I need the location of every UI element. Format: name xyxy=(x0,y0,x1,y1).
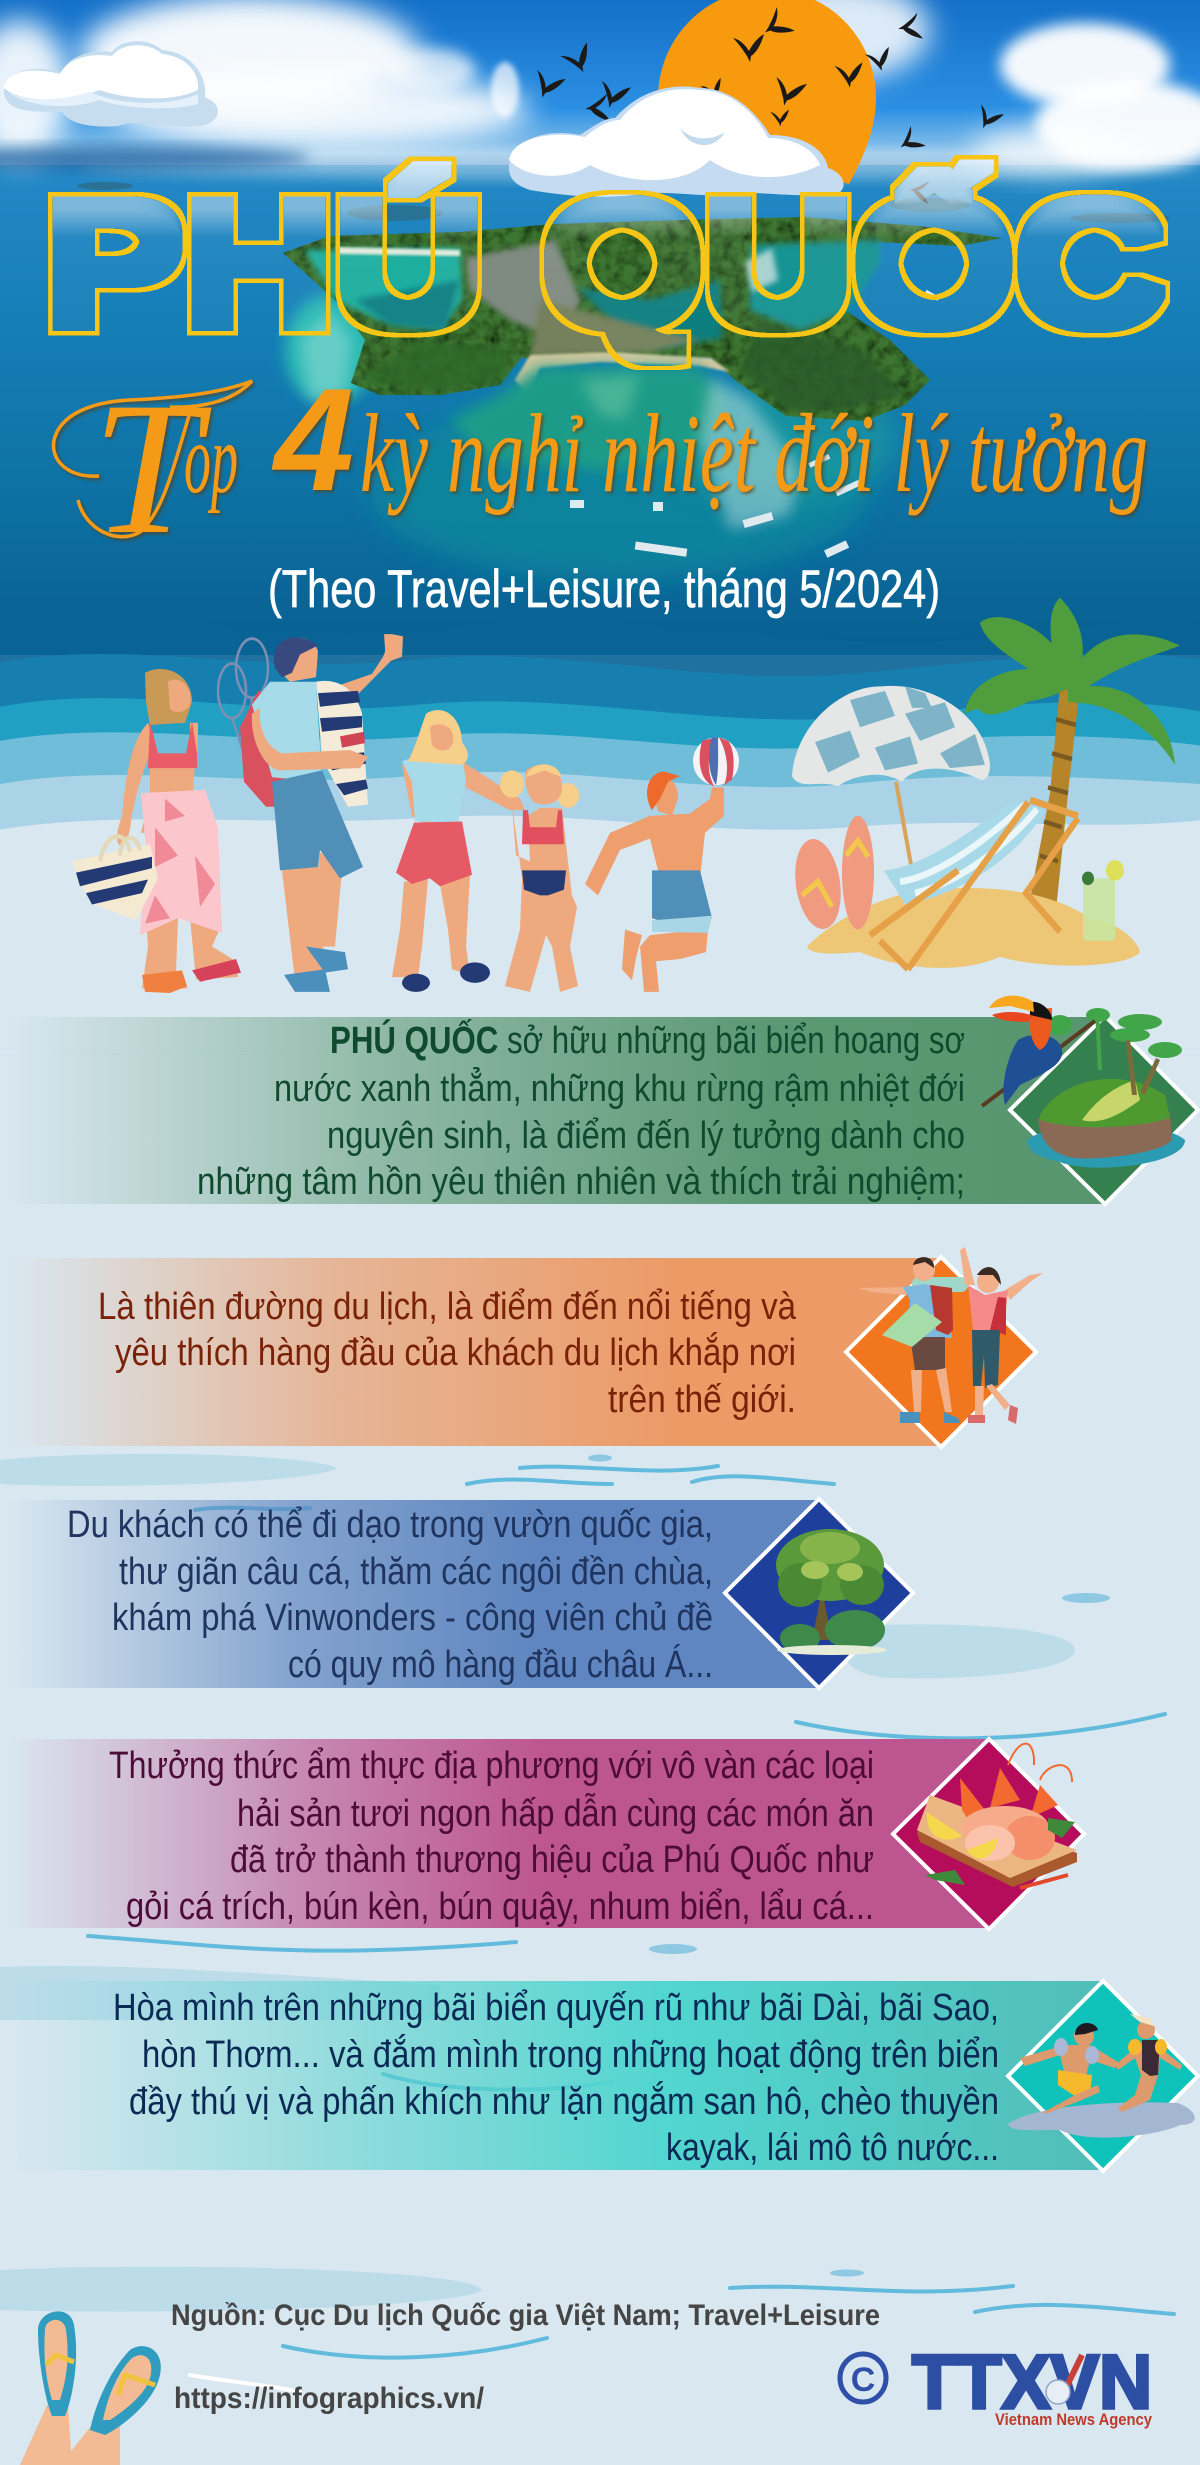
subtitle: Top 4: 4 xyxy=(271,358,354,521)
diamond with island and toucan xyxy=(982,996,1198,1204)
bays xyxy=(305,248,462,330)
body text: kayak, lái mô tô nước... xyxy=(666,2127,999,2169)
body text: nguyên sinh, là điểm đến lý tưởng dành cho xyxy=(327,1115,965,1157)
diamond with seafood board xyxy=(893,1739,1084,1929)
diamond with two travellers xyxy=(846,1247,1043,1447)
body text: trên thế giới. xyxy=(608,1379,796,1421)
body text: yêu thích hàng đầu của khách du lịch khắp nơi xyxy=(115,1331,796,1374)
icon: feet in flip-flops xyxy=(20,2311,161,2465)
body text xyxy=(197,1017,965,1203)
source text: Nguồn: Cục Du lịch Quốc gia Việt Nam; Travel+Leisure xyxy=(171,2299,880,2332)
subtitle: Top 4: T xyxy=(92,364,212,574)
far islands xyxy=(77,182,1170,223)
body text: hải sản tươi ngon hấp dẫn cùng các món ăn xyxy=(237,1792,874,1835)
subtitle: Top 4 xyxy=(53,358,1148,574)
body text: PHÚ QUỐC sở hữu những bãi biển hoang sơ xyxy=(330,1017,965,1062)
flock of birds xyxy=(528,5,1004,204)
logo: TTXVN: TTXVN xyxy=(912,2340,1152,2425)
illustrated cloud: small left xyxy=(4,41,218,127)
body text: khám phá Vinwonders - công viên chủ đề xyxy=(112,1597,713,1639)
body text xyxy=(113,1987,999,2169)
panel: thiên đường du lịch xyxy=(10,1247,1043,1447)
palm tree xyxy=(965,598,1180,910)
sky clouds xyxy=(0,0,1200,179)
body text: nước xanh thẳm, những khu rừng rậm nhiệt đới xyxy=(274,1066,965,1110)
website url: https://infographics.vn/ xyxy=(174,2382,485,2415)
body text: thư giãn câu cá, thăm các ngôi đền chùa, xyxy=(119,1551,713,1593)
panel: rừng nguyên sinh xyxy=(10,996,1198,1204)
source line under subtitle: (Theo Travel+Leisure, tháng 5/2024) xyxy=(268,560,940,619)
body text: có quy mô hàng đầu châu Á... xyxy=(288,1643,713,1686)
illustrated cloud: centre over the sun xyxy=(509,87,844,197)
body text: Hòa mình trên những bãi biển quyến rũ như bãi Dài, bãi Sao, xyxy=(113,1987,999,2029)
sun xyxy=(658,0,876,184)
copyright symbol xyxy=(840,2354,886,2402)
logo: TTXVN: Vietnam News Agency xyxy=(995,2410,1152,2429)
title: PHÚ QUỐC xyxy=(45,164,1165,363)
man with rackets and towel xyxy=(218,634,403,992)
panel: biển xyxy=(10,1981,1198,2171)
body text: đã trở thành thương hiệu của Phú Quốc như xyxy=(230,1839,874,1881)
diamond with tree xyxy=(725,1499,913,1688)
girl in red skirt xyxy=(392,710,525,992)
sea wave bands xyxy=(0,617,1200,1054)
body text: Du khách có thể đi dạo trong vườn quốc gia, xyxy=(67,1504,713,1546)
water ripples and puddles xyxy=(0,1454,1174,2392)
beach and central bay xyxy=(515,352,730,395)
body text xyxy=(67,1504,713,1686)
town area xyxy=(466,240,580,340)
panel: vườn quốc gia xyxy=(10,1499,913,1688)
panel: ẩm thực xyxy=(10,1739,1084,1929)
boats xyxy=(510,290,940,558)
body text: Thưởng thức ẩm thực địa phương với vô vàn các loại xyxy=(109,1745,874,1787)
body text xyxy=(109,1745,874,1928)
island forest xyxy=(283,217,1002,421)
small girl xyxy=(500,764,579,992)
body text: Là thiên đường du lịch, là điểm đến nổi tiếng và xyxy=(98,1286,797,1328)
body text: đầy thú vị và phấn khích như lặn ngắm san hô, chèo thuyền xyxy=(129,2080,999,2123)
beach umbrella xyxy=(792,686,990,870)
body text: những tâm hồn yêu thiên nhiên và thích trải nghiệm; xyxy=(197,1161,965,1203)
copyright symbol: C xyxy=(851,2361,875,2399)
subtitle: Top 4: op xyxy=(184,403,238,514)
sand mound with deck chair, flip-flops and cocktail xyxy=(789,800,1140,969)
woman with bag xyxy=(72,669,241,993)
header photo: sky and sea with the island xyxy=(0,0,1200,655)
turquoise shallows xyxy=(370,400,870,580)
beach family illustration xyxy=(72,634,739,993)
boy with beach ball xyxy=(585,737,739,992)
body text: gỏi cá trích, bún kèn, bún quậy, nhum biển, lẩu cá... xyxy=(126,1886,874,1928)
diamond with two swimmers xyxy=(1008,1981,1198,2171)
body text xyxy=(98,1286,797,1421)
body text: hòn Thơm... và đắm mình trong những hoạt động trên biển xyxy=(142,2033,999,2076)
